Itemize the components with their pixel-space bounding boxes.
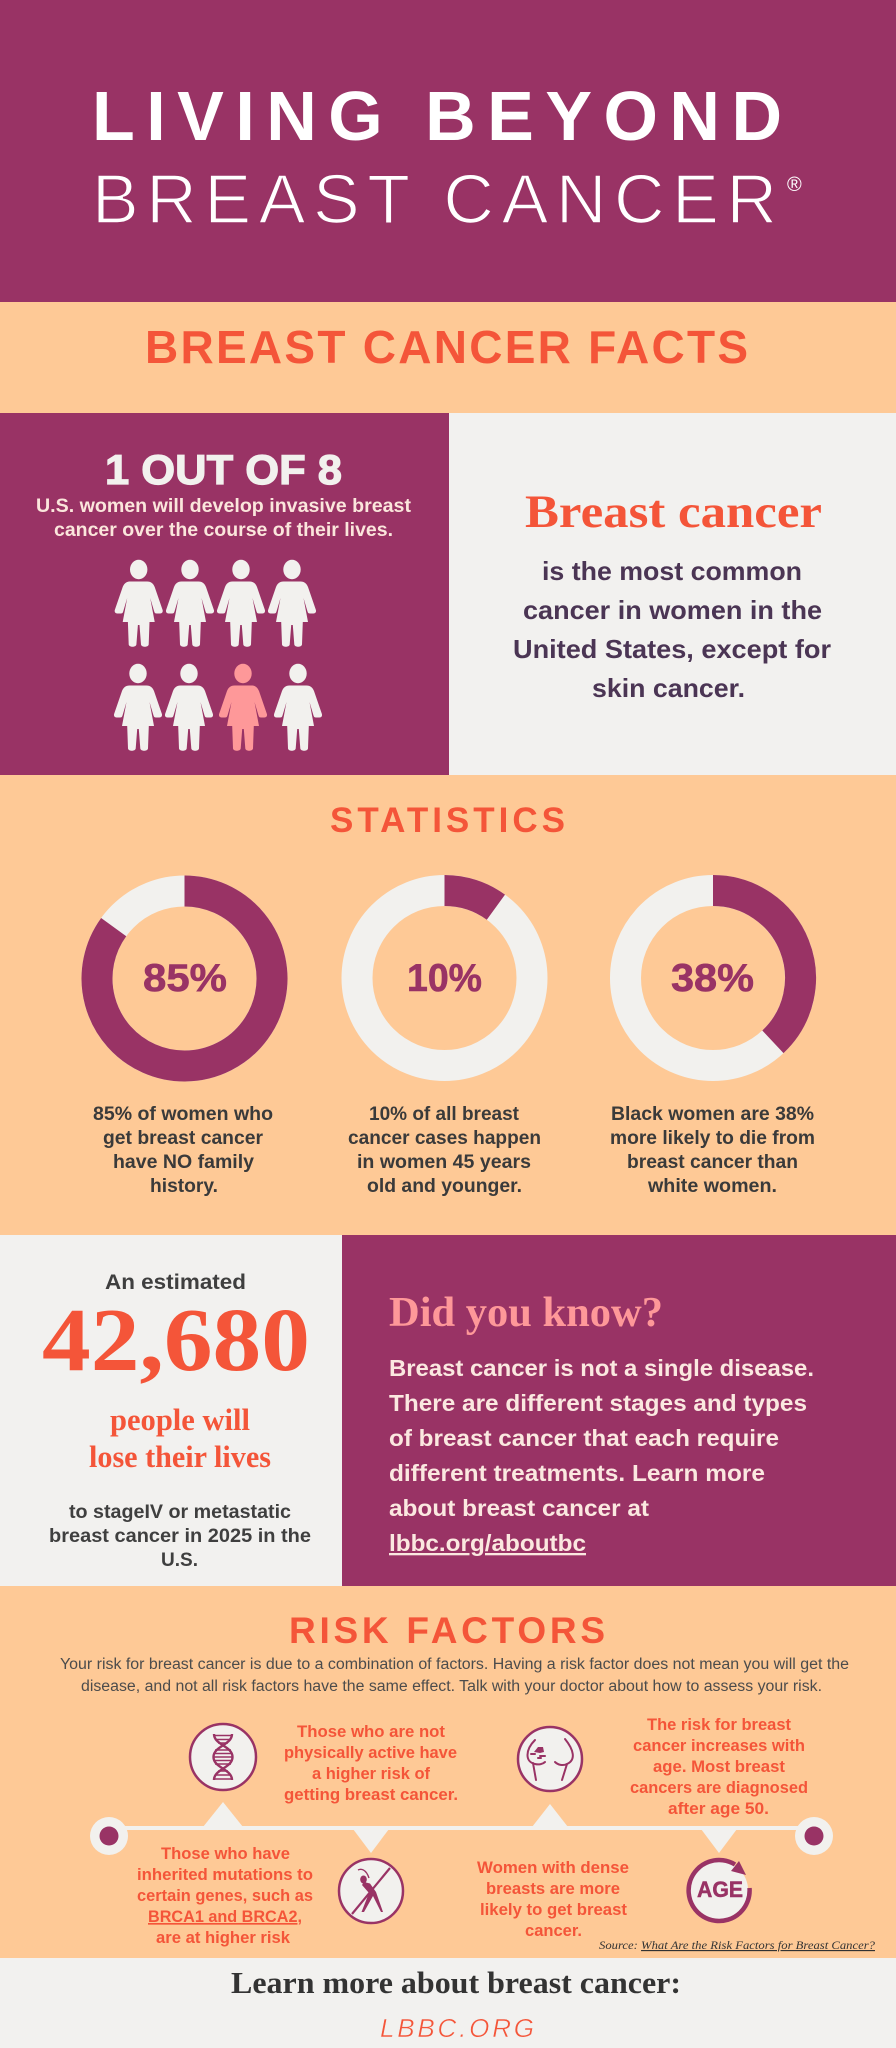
caption: 10%: 10% of all breast	[369, 1104, 520, 1125]
caption: 10%	[348, 1104, 541, 1197]
donut chart: 10%: 10%	[407, 957, 482, 1000]
caption: 85%: have NO family	[113, 1152, 254, 1173]
text: dense breasts	[477, 1859, 629, 1940]
icon: age: AGE	[697, 1877, 743, 1902]
panel: estimated deaths	[0, 1235, 342, 1586]
panel: 1 out of 8	[0, 413, 449, 775]
text: age risk	[630, 1716, 808, 1818]
text: age risk: The risk for breast	[647, 1716, 792, 1734]
text: inherited mutations	[137, 1845, 313, 1947]
icon: no exercise	[339, 1859, 403, 1923]
text block: cancer in women in the	[523, 595, 822, 625]
text block	[513, 556, 831, 703]
description	[36, 496, 412, 541]
text: physical activity: getting breast cancer.	[284, 1786, 458, 1804]
text block: United States, except for	[513, 634, 831, 664]
text: dense breasts: cancer.	[525, 1922, 582, 1940]
caption: 85%: 85% of women who	[93, 1104, 273, 1125]
donut chart: 85%	[97, 891, 272, 1066]
heading: statistics: STATISTICS	[330, 801, 565, 840]
text: physical activity: physically active have	[284, 1744, 457, 1762]
panel: header	[0, 0, 896, 302]
description: U.S. women will develop invasive breast	[36, 496, 412, 517]
text: age risk: age. Most breast	[653, 1758, 785, 1776]
text: age risk: cancers are diagnosed	[630, 1779, 808, 1797]
timeline	[90, 1802, 833, 1855]
serif statement: people will	[110, 1402, 250, 1437]
lead-in: An estimated	[105, 1271, 246, 1294]
pictogram: eight women, one highlighted	[114, 560, 322, 751]
text: dense breasts: Women with dense	[477, 1859, 629, 1877]
panel: footer	[0, 1958, 896, 2048]
text: age risk: cancer increases with	[633, 1737, 805, 1755]
intro text: disease, and not all risk factors have the same effect. Talk with your doctor about how to assess your risk.	[81, 1678, 822, 1695]
text: inherited mutations: inherited mutations to	[137, 1866, 313, 1884]
body text: lbbc.org/aboutbc	[389, 1530, 586, 1556]
footer heading: Learn more about breast cancer:	[231, 1965, 681, 2000]
text: physical activity	[284, 1723, 458, 1804]
icon: age	[689, 1860, 750, 1921]
body text: of breast cancer that each require	[389, 1425, 779, 1451]
body text: There are different stages and types	[389, 1390, 807, 1416]
text: inherited mutations: Those who have	[161, 1845, 290, 1863]
donut chart: 85%: 85%	[143, 957, 227, 1000]
text: physical activity: Those who are not	[297, 1723, 446, 1741]
heading: 1 out of 8: 1 OUT OF 8	[105, 446, 342, 493]
closing text: to stageIV or metastatic	[69, 1502, 291, 1523]
intro text	[60, 1656, 849, 1695]
caption: 10%: in women 45 years	[357, 1152, 531, 1173]
intro text: Your risk for breast cancer is due to a combination of factors. Having a risk factor does not mean you will get the	[60, 1656, 849, 1673]
serif statement: lose their lives	[89, 1439, 271, 1474]
text: inherited mutations: are at higher risk	[156, 1929, 291, 1947]
heading: breast cancer facts: BREAST CANCER FACTS	[145, 321, 748, 373]
text: dense breasts: breasts are more	[486, 1880, 620, 1898]
text block: skin cancer.	[592, 673, 745, 703]
caption: 38%: more likely to die from	[610, 1128, 815, 1149]
caption: 85%: get breast cancer	[103, 1128, 264, 1149]
caption: 38%: breast cancer than	[627, 1152, 798, 1173]
donut chart: 38%	[626, 890, 801, 1066]
caption: 38%: Black women are 38%	[611, 1104, 814, 1125]
text: physical activity: a higher risk of	[312, 1765, 431, 1783]
source note: Source: What Are the Risk Factors for Breast Cancer?	[599, 1940, 875, 1952]
donut chart: 38%: 38%	[671, 957, 754, 1000]
closing text	[49, 1502, 311, 1571]
caption: 10%: old and younger.	[367, 1176, 522, 1197]
text: inherited mutations: certain genes, such as	[137, 1887, 313, 1905]
caption: 38%: white women.	[647, 1176, 777, 1197]
panel: most common cancer	[449, 413, 896, 775]
body text: about breast cancer at	[389, 1495, 649, 1521]
caption: 85%: history.	[150, 1176, 218, 1197]
closing text: breast cancer in 2025 in the	[49, 1526, 311, 1547]
heading: did you know: Did you know?	[389, 1290, 663, 1336]
text: dense breasts: likely to get breast	[480, 1901, 628, 1919]
text: inherited mutations: BRCA1 and BRCA2,	[148, 1908, 302, 1926]
panel: risk factors	[0, 1586, 896, 1958]
body text: different treatments. Learn more	[389, 1460, 765, 1486]
text: age risk: after age 50.	[668, 1800, 769, 1818]
caption: 38%	[610, 1104, 815, 1197]
caption: 10%: cancer cases happen	[348, 1128, 541, 1149]
big number: 42,680	[42, 1291, 310, 1390]
footer link: LBBC.ORG	[380, 2013, 534, 2043]
panel: statistics	[0, 775, 896, 1235]
heading: risk factors: RISK FACTORS	[289, 1610, 605, 1651]
panel: did you know	[342, 1235, 896, 1586]
text block: is the most common	[542, 556, 802, 586]
closing text: U.S.	[161, 1550, 198, 1571]
body text: Breast cancer is not a single disease.	[389, 1355, 814, 1381]
registered mark: ®	[787, 174, 802, 196]
caption: 85%	[93, 1104, 273, 1197]
icon: dna	[190, 1724, 256, 1790]
donut chart: 10%	[357, 890, 532, 1066]
heading: breast cancer: Breast cancer	[525, 486, 822, 538]
serif statement	[89, 1402, 271, 1474]
logo line one: LIVING BEYOND	[92, 77, 782, 155]
body text	[389, 1355, 814, 1556]
icon: dense breast	[518, 1727, 582, 1791]
panel: facts title band	[0, 302, 896, 413]
logo line two: BREAST CANCER	[92, 160, 777, 238]
description: cancer over the course of their lives.	[54, 520, 393, 541]
